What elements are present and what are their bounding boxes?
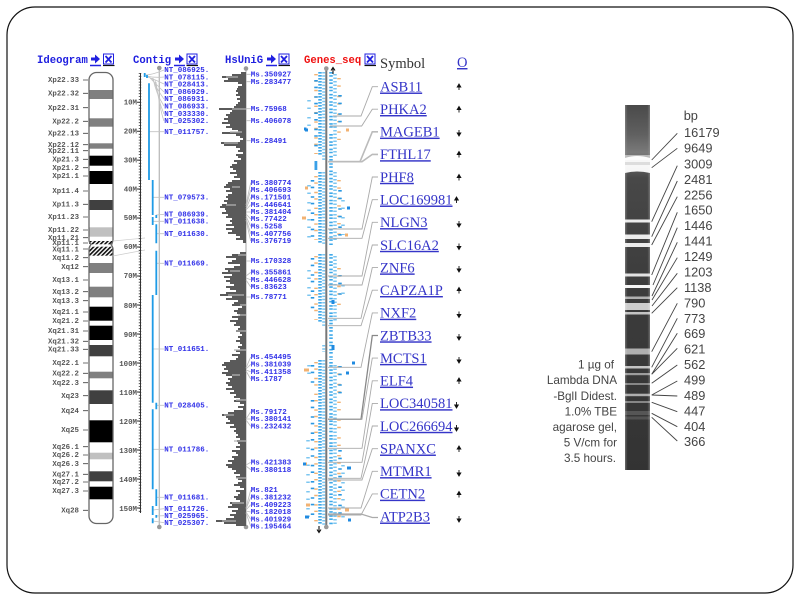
chromosome X bands (89, 72, 145, 524)
ideogram heading (37, 54, 114, 67)
base pair labels: 562 (684, 357, 705, 372)
band labels: Xq23 (61, 393, 80, 401)
strand direction arrows (455, 84, 461, 522)
band labels: Xq21.1 (52, 309, 80, 317)
gel caption: 3.5 hours. (564, 452, 616, 465)
band labels: Xp11.23 (48, 214, 80, 222)
megabase ruler: 150M (119, 506, 138, 514)
unigene labels: Ms.83623 (251, 284, 287, 292)
unigene labels: Ms.75968 (251, 106, 287, 114)
megabase ruler: 110M (119, 390, 138, 398)
band ticks (83, 80, 88, 510)
band labels: Xp21.1 (52, 173, 80, 181)
unigene labels: Ms.446628 (251, 277, 292, 285)
band labels: Xq13.1 (52, 277, 80, 285)
gel caption: agarose gel, (553, 421, 617, 434)
base pair labels: bp (684, 108, 698, 123)
unigene labels: Ms.406693 (251, 187, 292, 195)
megabase ruler: 120M (119, 419, 138, 427)
gene symbol links: ZNF6 (380, 260, 415, 276)
contig labels: NT_011786. (164, 446, 209, 454)
base pair labels: 489 (684, 388, 705, 403)
gene symbol links: PHKA2 (380, 102, 427, 118)
panel: agarose gel (547, 105, 720, 470)
band labels: Xq22.1 (52, 360, 80, 368)
unigene labels: Ms.409223 (251, 502, 292, 510)
megabase ruler: 130M (119, 448, 138, 456)
unigene labels: Ms.232432 (251, 424, 292, 432)
band labels: Xq27.1 (52, 472, 80, 480)
unigene labels: Ms.407756 (251, 231, 292, 239)
unigene labels: Ms.406078 (251, 118, 292, 126)
band labels: Xp22.2 (52, 118, 79, 126)
unigene connector ticks (246, 74, 251, 526)
gel caption: 5 V/cm for (564, 436, 617, 450)
base pair labels: 499 (684, 372, 705, 388)
unigene labels: Ms.1787 (251, 376, 282, 384)
base pair labels: 1446 (684, 218, 712, 233)
band labels: Xp22.32 (48, 90, 79, 98)
band labels: Xq21.2 (52, 318, 79, 326)
gene symbol links: NLGN3 (380, 215, 428, 231)
base pair labels: 16179 (684, 125, 720, 140)
gel caption (547, 358, 617, 465)
contig labels: NT_028413. (164, 82, 209, 90)
unigene labels: Ms.454495 (251, 354, 292, 362)
base pair labels: 773 (684, 311, 705, 326)
contig labels: NT_011757. (164, 129, 209, 137)
unigene labels: Ms.381404 (251, 209, 292, 217)
band labels: Xq12 (61, 264, 79, 272)
megabase ruler: 80M (124, 303, 138, 311)
unigene labels: Ms.350927 (251, 72, 291, 80)
Symbol column heading: Symbol (380, 56, 425, 72)
contig labels: NT_025965. (164, 513, 209, 521)
gene symbol links: LOC340581 (380, 396, 452, 412)
megabase ruler: 70M (124, 273, 138, 281)
contig labels: NT_011669. (164, 260, 209, 268)
contig labels: NT_011651. (164, 346, 209, 354)
gene symbol links: LOC266694 (380, 419, 453, 435)
band labels: Xp22.11 (48, 148, 80, 156)
base pair labels: 1441 (684, 234, 712, 248)
band labels: Xq13.2 (52, 289, 79, 297)
gene symbol links: CAPZA1P (380, 283, 443, 299)
panel: ideogram (37, 54, 145, 524)
band labels: Xq11.2 (52, 255, 79, 263)
panel: contig (119, 54, 209, 529)
contig labels: NT_028405. (164, 402, 209, 410)
contig labels: NT_078115. (164, 74, 209, 82)
contig labels: NT_086939. (164, 212, 209, 220)
band labels: Xp11.3 (52, 202, 80, 210)
base pair labels: 9649 (684, 141, 712, 156)
megabase ruler: 90M (124, 332, 138, 340)
base pair labels: 669 (684, 326, 705, 341)
band labels: Xq27.2 (52, 479, 79, 487)
gel lane with bands (625, 105, 650, 470)
gene symbol links: NXF2 (380, 306, 416, 322)
band labels: Xp11.21 (48, 235, 80, 243)
band labels: Xq21.32 (48, 338, 79, 346)
band labels: Xq11.1 (52, 246, 80, 254)
gene symbol links: SLC16A2 (380, 238, 439, 254)
megabase ruler: 60M (124, 244, 138, 252)
gene symbol links: MCTS1 (380, 351, 427, 367)
ideogram heading: Ideogram (37, 55, 88, 67)
contig labels: NT_086933. (164, 104, 209, 112)
unigene labels: Ms.376719 (251, 238, 292, 246)
unigene labels (251, 72, 292, 532)
panel: gene symbols (380, 55, 467, 526)
unigene labels: Ms.79172 (251, 409, 287, 417)
contig axis and segments (145, 66, 164, 529)
megabase ruler: 30M (124, 158, 138, 166)
band labels: Xq27.3 (52, 488, 80, 496)
unigene labels: Ms.446641 (251, 202, 292, 210)
band labels: Xq25 (61, 427, 80, 435)
Genes_seq heading: Genes_seq (304, 55, 361, 67)
megabase ruler: 50M (124, 215, 138, 223)
band labels: Xq21.33 (48, 346, 80, 354)
unigene labels: Ms.283477 (251, 79, 291, 87)
contig labels: NT_086925. (164, 67, 209, 75)
unigene labels: Ms.78771 (251, 294, 287, 302)
HsUniG heading (225, 54, 290, 67)
gel caption: -BglI Didest. (553, 390, 617, 403)
base pair labels: 404 (684, 419, 705, 434)
band labels: Xp21.3 (52, 156, 80, 164)
contig labels: NT_086931. (164, 96, 209, 104)
megabase ruler: 40M (124, 186, 138, 194)
contig labels: NT_011726. (164, 506, 209, 514)
contig labels: NT_011638. (164, 218, 209, 226)
contig labels: NT_086929. (164, 89, 209, 97)
gene symbol links: PHF8 (380, 170, 414, 186)
gene symbol links: MTMR1 (380, 464, 432, 480)
unigene labels: Ms.401929 (251, 516, 292, 524)
megabase ruler: 140M (119, 477, 138, 485)
contig labels: NT_011630. (164, 231, 209, 239)
base pair labels (684, 108, 720, 449)
contig labels (164, 67, 209, 528)
gene symbol links: ASB11 (380, 80, 422, 96)
gene symbol links: LOC169981 (380, 192, 452, 208)
panel: HsUniGene (216, 54, 292, 532)
unigene labels: Ms.355861 (251, 270, 292, 278)
band labels: Xp21.2 (52, 165, 79, 173)
band labels: Xq13.3 (52, 298, 80, 306)
band labels: Xp22.12 (48, 142, 79, 150)
unigene labels: Ms.195464 (251, 524, 292, 532)
base pair labels: 790 (684, 296, 705, 310)
gene symbol links: ELF4 (380, 374, 414, 390)
gene symbol links: FTHL17 (380, 147, 431, 163)
gene symbol links: MAGEB1 (380, 125, 440, 141)
band labels (48, 77, 80, 516)
band labels: Xp11.1 (52, 240, 80, 248)
base pair labels: 366 (684, 434, 705, 449)
base pair labels: 621 (684, 342, 705, 356)
O column heading: O (457, 55, 467, 71)
base pair labels: 2481 (684, 172, 712, 187)
base pair labels: 1249 (684, 249, 712, 264)
megabase ruler: 20M (124, 128, 138, 136)
contig labels: NT_011681. (164, 494, 209, 502)
unigene labels: Ms.381232 (251, 494, 292, 502)
unigene labels: Ms.421383 (251, 460, 292, 468)
panel: genes track (302, 54, 378, 532)
band labels: Xq22.3 (52, 380, 80, 388)
unigene labels: Ms.411358 (251, 369, 292, 377)
gene symbol links: ZBTB33 (380, 328, 432, 344)
contig labels: NT_033330. (164, 111, 209, 119)
base pair labels: 447 (684, 404, 705, 418)
gene connector lines (328, 87, 378, 517)
band leader lines (652, 133, 677, 441)
band labels: Xq21.31 (48, 328, 80, 336)
band labels: Xq26.3 (52, 461, 80, 469)
HsUniG heading: HsUniG (225, 55, 263, 67)
gel caption: 1 µg of (578, 358, 615, 372)
band labels: Xp11.22 (48, 227, 79, 235)
gel caption: Lambda DNA (547, 374, 617, 387)
unigene labels: Ms.380141 (251, 416, 292, 424)
density histogram (216, 66, 248, 529)
megabase ruler (119, 73, 140, 514)
contig labels: NT_025307. (164, 520, 209, 528)
unigene labels: Ms.5258 (251, 224, 283, 232)
band labels: Xq22.2 (52, 370, 79, 378)
band labels: Xp22.31 (48, 105, 80, 113)
band labels: Xq24 (61, 408, 80, 416)
gene symbol links (380, 80, 453, 526)
megabase ruler: 10M (124, 100, 138, 108)
band labels: Xp11.4 (52, 188, 80, 196)
contig labels: NT_079573. (164, 194, 209, 202)
unigene labels: Ms.77422 (251, 216, 287, 224)
band labels: Xq26.1 (52, 444, 80, 452)
gene track marks (302, 66, 355, 529)
contig heading: Contig (133, 55, 171, 67)
strand arrows on track (317, 68, 335, 532)
gene symbol links: SPANXC (380, 442, 436, 458)
base pair labels: 3009 (684, 156, 712, 172)
base pair labels: 2256 (684, 188, 712, 202)
gene symbol links: ATP2B3 (380, 510, 430, 526)
unigene labels: Ms.170328 (251, 258, 292, 266)
unigene labels: Ms.821 (251, 487, 278, 495)
gel caption: 1.0% TBE (565, 406, 617, 418)
band labels: Xp22.33 (48, 77, 80, 85)
unigene labels: Ms.171501 (251, 194, 292, 202)
unigene labels: Ms.380774 (251, 180, 292, 188)
band labels: Xq26.2 (52, 452, 79, 460)
unigene labels: Ms.381039 (251, 362, 292, 370)
base pair labels: 1138 (684, 280, 712, 295)
megabase ruler: 100M (119, 361, 138, 369)
contig labels: NT_025302. (164, 118, 209, 126)
base pair labels: 1203 (684, 264, 712, 280)
band labels: Xp22.13 (48, 130, 80, 138)
unigene labels: Ms.28491 (251, 138, 287, 146)
base pair labels: 1650 (684, 202, 712, 218)
band labels: Xq28 (61, 508, 80, 516)
contig heading (133, 54, 198, 67)
gene symbol links: CETN2 (380, 487, 425, 503)
unigene labels: Ms.380118 (251, 467, 292, 475)
unigene labels: Ms.182018 (251, 509, 292, 517)
